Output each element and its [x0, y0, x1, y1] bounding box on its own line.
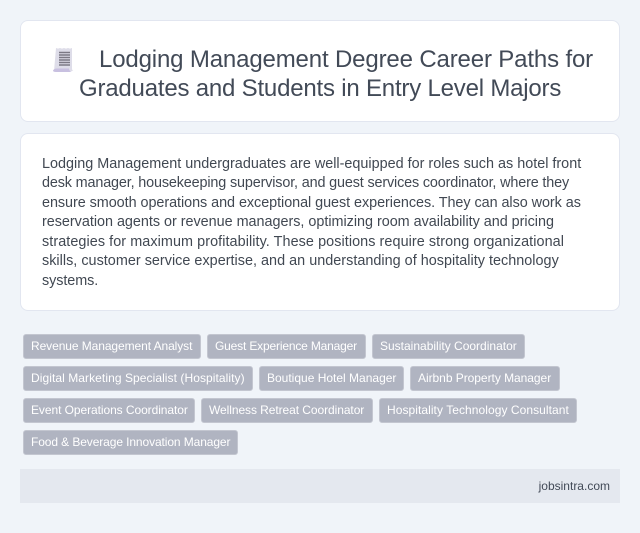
- text block: description: Lodging Management undergraduates are well-equipped for roles such as hotel front: [42, 156, 581, 172]
- text block: description: reservation agents or revenue managers, optimizing room availability and pricing: [42, 214, 554, 230]
- panel: title card: [20, 20, 620, 122]
- tag: Boutique Hotel Manager: [267, 371, 396, 385]
- tag: [201, 398, 373, 423]
- tag: Food & Beverage Innovation Manager: [31, 435, 230, 449]
- tag: Guest Experience Manager: [215, 339, 357, 353]
- tag: [372, 334, 525, 359]
- tag: [23, 334, 201, 359]
- footer text: jobsintra.com: [539, 479, 610, 493]
- tag: [207, 334, 366, 359]
- heading: title: Graduates and Students in Entry Level Majors: [79, 75, 561, 102]
- tag: Revenue Management Analyst: [31, 339, 192, 353]
- text block: description: desk manager, housekeeping supervisor, and guest services coordinator, where they: [42, 175, 569, 191]
- text block: description: strategies for maximum profitability. These positions require strong organizational: [42, 234, 564, 250]
- tag: [23, 366, 253, 391]
- text block: description: skills, customer service expertise, and an understanding of hospitality technology: [42, 253, 559, 269]
- icon: document scroll: [53, 48, 73, 72]
- panel: description: [20, 133, 620, 311]
- heading: title: [79, 46, 593, 102]
- tag list: career paths: [23, 334, 577, 455]
- text block: description: systems.: [42, 273, 98, 289]
- text block: description: ensure smooth operations and exceptional guest experiences. They can also work as: [42, 195, 581, 211]
- tag: [23, 430, 238, 455]
- tag: [23, 398, 195, 423]
- tag: Sustainability Coordinator: [380, 339, 517, 353]
- text block: description: [42, 156, 582, 289]
- footer bar: [20, 469, 620, 503]
- tag: Wellness Retreat Coordinator: [209, 403, 364, 417]
- tag: [259, 366, 404, 391]
- tag: Event Operations Coordinator: [31, 403, 188, 417]
- heading: title: Lodging Management Degree Career Paths for: [99, 46, 593, 73]
- tag: [379, 398, 577, 423]
- tag: Digital Marketing Specialist (Hospitality): [31, 371, 245, 385]
- tag: [410, 366, 560, 391]
- tag: Hospitality Technology Consultant: [387, 403, 569, 417]
- tag: Airbnb Property Manager: [418, 371, 551, 385]
